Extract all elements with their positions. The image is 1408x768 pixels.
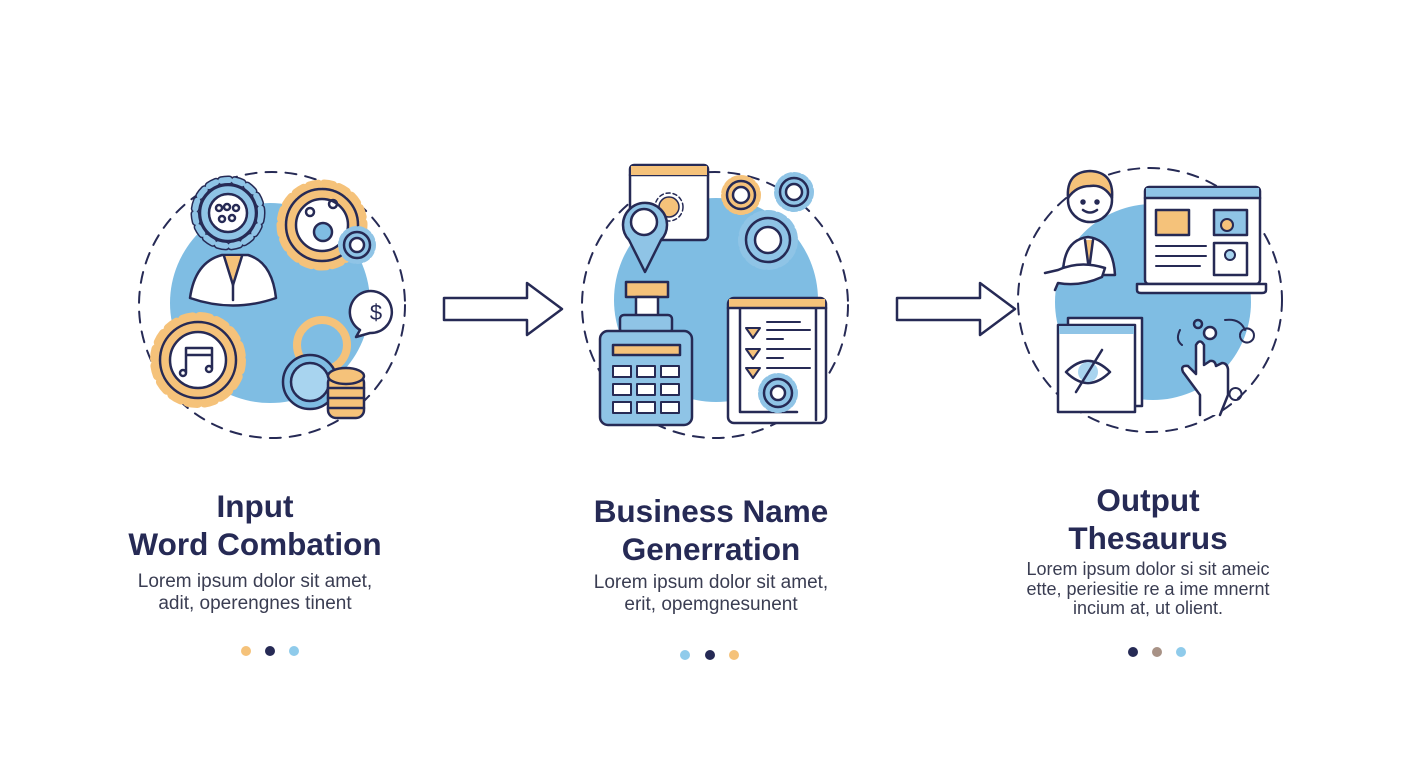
dots row 2 [680, 650, 739, 660]
title: generation: Business Name [594, 493, 828, 529]
dots row 3 [1128, 647, 1186, 657]
title: output: Output [1096, 482, 1200, 518]
text: generation body [594, 572, 828, 615]
icon: coins [283, 320, 364, 418]
icon: dollar bubble [350, 291, 392, 337]
title: input: Input [217, 488, 293, 524]
title: input: Word Combation [128, 526, 382, 562]
icon: hand touch [1178, 320, 1254, 415]
icon: music gear [155, 317, 241, 403]
dots row 1 [241, 646, 299, 656]
icon: small blue gear [341, 229, 373, 261]
icon: calculator stamp [600, 282, 692, 425]
icon: checklist document [728, 298, 826, 423]
icon: pin [623, 203, 667, 272]
panel: output icon [1018, 168, 1282, 432]
panel: input icon [139, 172, 405, 438]
title: input [128, 488, 382, 562]
text: output body: ette, periesitie re a ime mnernt [1026, 578, 1270, 598]
icon: dollar bubble: $ [370, 300, 382, 325]
icon: orange gear [281, 184, 363, 266]
arrow 2 [897, 283, 1015, 335]
title: generation: Generration [622, 531, 800, 567]
icon: shirt [190, 255, 276, 306]
title: generation [594, 493, 828, 567]
arrow 1 [444, 283, 562, 335]
text: output body: Lorem ipsum dolor si sit ameic [1026, 559, 1270, 579]
title: output: Thesaurus [1068, 520, 1228, 556]
text: generation body: erit, opemgnesunent [624, 594, 798, 615]
icon: blue gear [195, 180, 261, 246]
text: input body: Lorem ipsum dolor sit amet, [138, 571, 372, 592]
icon: gears [724, 175, 811, 266]
text: output body [1026, 559, 1270, 618]
text: input body [138, 571, 372, 614]
panel: generation icon [582, 165, 848, 438]
icon: browser window [630, 165, 708, 240]
text: generation body: Lorem ipsum dolor sit amet, [594, 572, 828, 593]
icon: hidden document [1058, 318, 1142, 412]
title: output [1068, 482, 1228, 556]
icon: laptop [1137, 187, 1266, 293]
icon: person [1045, 171, 1115, 290]
text: output body: incium at, ut olient. [1073, 598, 1223, 618]
text: input body: adit, operengnes tinent [158, 593, 352, 614]
